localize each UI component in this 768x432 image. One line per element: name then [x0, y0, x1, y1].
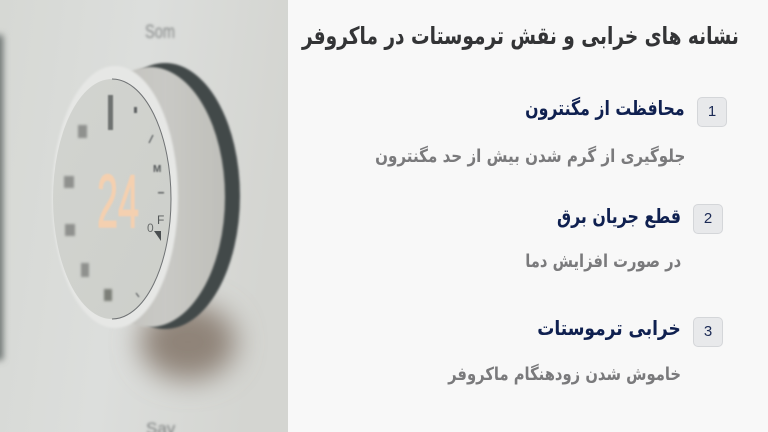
- number badge 3: 3: [704, 323, 712, 340]
- left dark edge: [0, 35, 3, 360]
- number badge 2: 2: [704, 210, 712, 227]
- dial face: [53, 79, 171, 319]
- item 2: [525, 204, 723, 272]
- temperature display: 24: [97, 159, 139, 243]
- face edge line: [112, 79, 171, 319]
- dark back ring: [90, 63, 240, 329]
- item 3: [448, 316, 723, 385]
- number badge 1: [697, 97, 727, 127]
- number badge 1: 1: [708, 103, 716, 120]
- dial marks: [108, 95, 164, 297]
- item 2 heading: قطع جریان برق: [557, 204, 681, 228]
- item 1 description: جلوگیری از گرم شدن بیش از حد مگنترون: [375, 146, 685, 167]
- photo: thermostat dial: F: [157, 213, 164, 227]
- wall label top: Som: [145, 22, 175, 43]
- rim: [52, 66, 178, 328]
- photo: thermostat dial: 0: [147, 221, 154, 235]
- wall shadow: [140, 304, 236, 380]
- dial side body: [75, 67, 225, 327]
- photo: thermostat dial: [0, 0, 288, 432]
- item 1 heading: محافظت از مگنترون: [526, 96, 685, 120]
- item 3 description: خاموش شدن زودهنگام ماکروفر: [448, 364, 681, 385]
- title: نشانه های خرابی و نقش ترموستات در ماکروفر: [302, 22, 739, 50]
- blurred dial labels: [64, 125, 112, 301]
- item 3 heading: خرابی ترموستات: [538, 316, 681, 340]
- dial letters: M: [153, 164, 161, 175]
- item 2 description: در صورت افزایش دما: [525, 251, 681, 272]
- item 1: [375, 96, 727, 167]
- small triangle: [154, 231, 161, 241]
- number badge 3: [693, 317, 723, 347]
- number badge 2: [693, 204, 723, 234]
